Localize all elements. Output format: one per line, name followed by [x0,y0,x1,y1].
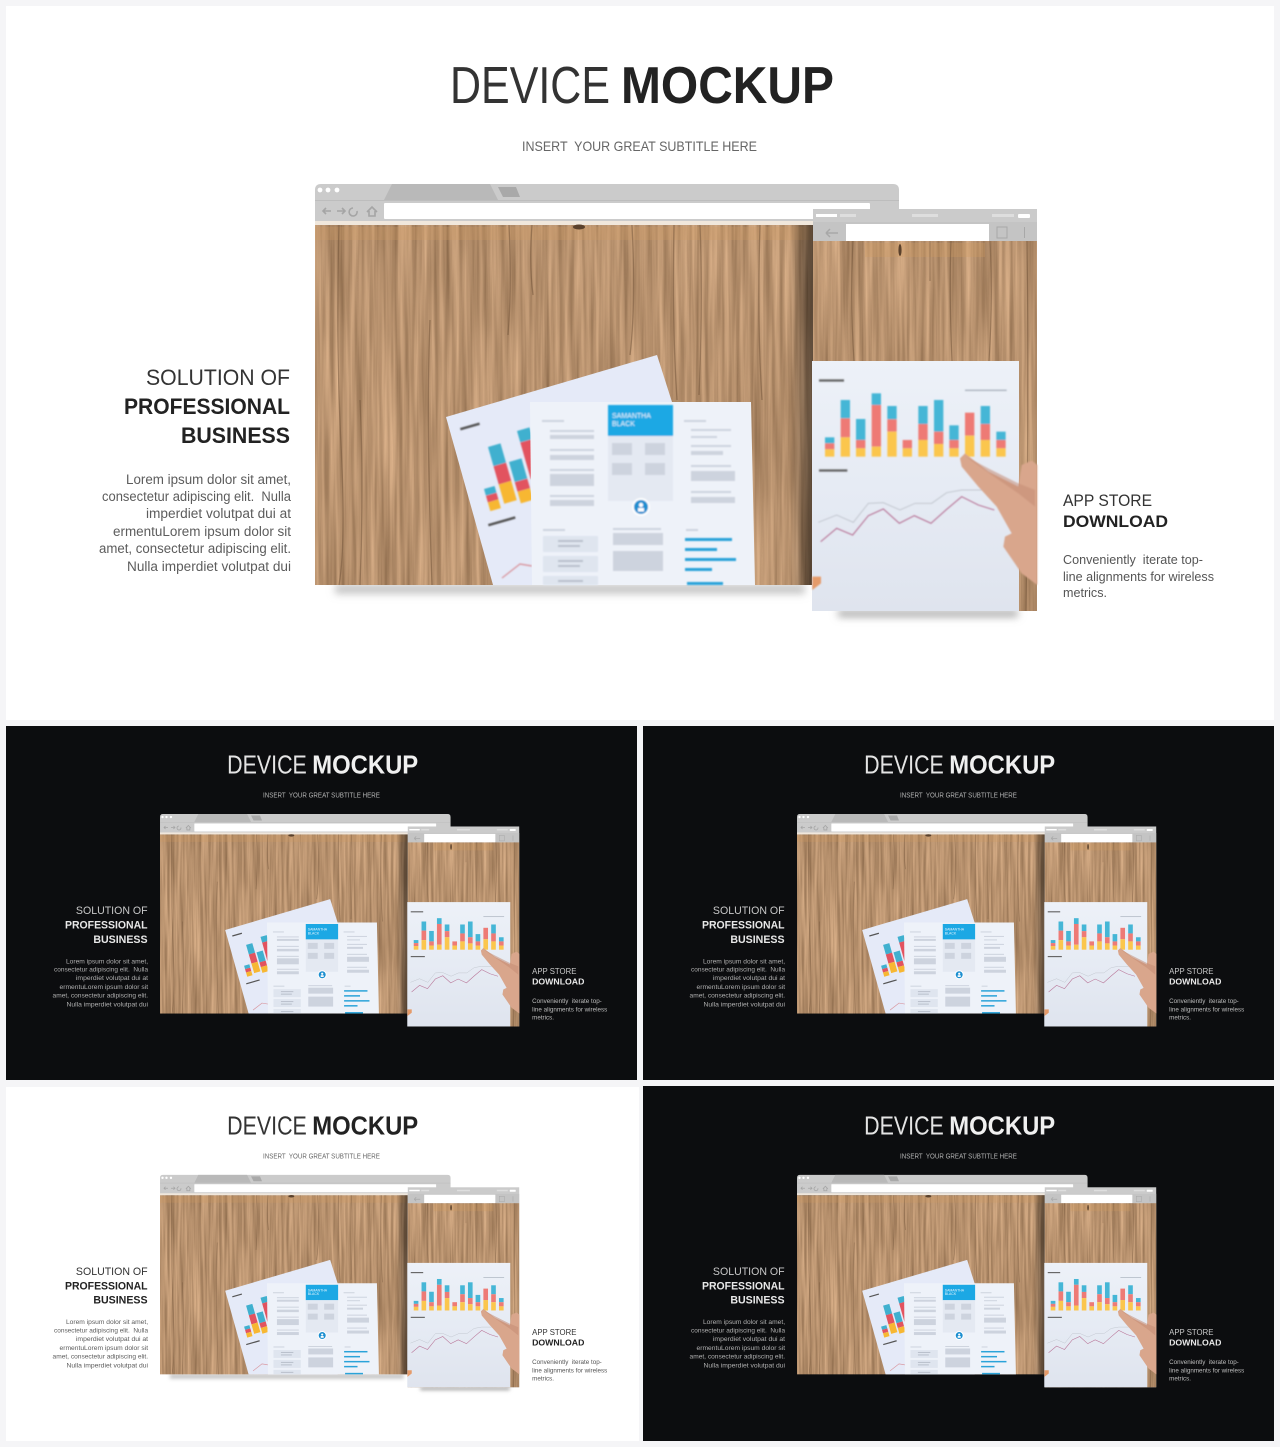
title [450,57,834,115]
panel: dark slide bottom right: imperdiet volutpat dui at [713,1336,785,1343]
panel: dark slide top left: MOCKUP [312,752,418,780]
panel: dark slide top left: BUSINESS [93,934,148,946]
panel: dark slide top right: APP STORE [1169,966,1214,976]
panel: dark slide top right: line alignments for wireless [1169,1007,1244,1014]
panel: dark slide top right: metrics. [1169,1015,1191,1022]
panel: dark slide top left [6,726,637,1080]
body text right: line alignments for wireless [1063,569,1214,584]
panel: dark slide bottom right: DOWNLOAD [1169,1337,1221,1347]
panel: white slide bottom left: line alignments for wireless [532,1367,607,1374]
panel: dark slide top left: Conveniently iterate top- [532,998,602,1005]
panel: dark slide top left: SOLUTION OF [76,905,148,917]
panel: dark slide bottom right: DEVICE [864,1113,944,1141]
panel: dark slide top right: BUSINESS [730,934,785,946]
panel: white slide bottom left: DOWNLOAD [532,1337,584,1347]
panel: dark slide top right: imperdiet volutpat dui at [713,975,785,982]
panel: dark slide top right: INSERT YOUR GREAT SUBTITLE HERE [900,793,1017,800]
panel: dark slide top left: Nulla imperdiet volutpat dui [66,1002,149,1009]
panel: dark slide top right: consectetur adipiscing elit. Nulla [691,967,785,974]
heading: solution of professional business: SOLUTION OF [146,365,290,390]
panel: white slide bottom left: DEVICE [227,1113,307,1141]
panel: dark slide bottom right: Nulla imperdiet volutpat dui [703,1362,786,1369]
panel: dark slide top right: Conveniently iterate top- [1169,998,1239,1005]
panel: dark slide top left: ermentuLorem ipsum dolor sit [60,984,148,991]
panel: dark slide bottom right: metrics. [1169,1375,1191,1382]
panel: dark slide top right: SOLUTION OF [713,905,785,917]
panel: white slide bottom left: Nulla imperdiet volutpat dui [66,1362,149,1369]
panel: white slide bottom left: APP STORE [532,1327,577,1337]
body text right: metrics. [1063,585,1107,600]
panel: main white slide [6,6,1274,720]
heading: app store download: APP STORE [1063,491,1152,510]
panel: white slide bottom left: imperdiet volutpat dui at [76,1336,148,1343]
panel: white slide bottom left: Conveniently iterate top- [532,1359,602,1366]
panel: dark slide bottom right: SOLUTION OF [713,1266,785,1278]
panel: dark slide bottom right: amet, consectetur adipiscing elit. [690,1353,785,1360]
panel: dark slide top left: INSERT YOUR GREAT SUBTITLE HERE [263,793,380,800]
panel: white slide bottom left: consectetur adipiscing elit. Nulla [54,1328,148,1335]
title: MOCKUP [621,57,834,115]
panel: dark slide top left: APP STORE [532,966,577,976]
panel: white slide bottom left: MOCKUP [312,1113,418,1141]
panel: dark slide top left: metrics. [532,1015,554,1022]
panel: white slide bottom left: INSERT YOUR GREAT SUBTITLE HERE [263,1153,380,1160]
panel: dark slide top right: Nulla imperdiet volutpat dui [703,1002,786,1009]
body text left: amet, consectetur adipiscing elit. [99,541,291,556]
body text right [1063,552,1214,600]
subtitle: INSERT YOUR GREAT SUBTITLE HERE [522,138,757,154]
body text left: ermentuLorem ipsum dolor sit [113,524,291,539]
body text left: Nulla imperdiet volutpat dui [127,559,291,574]
body text left [99,472,291,574]
heading: app store download [1063,491,1168,531]
panel: dark slide bottom right: PROFESSIONAL [702,1280,785,1292]
panel: dark slide top left: DOWNLOAD [532,977,584,987]
panel: dark slide bottom right: APP STORE [1169,1327,1214,1337]
heading: solution of professional business: BUSINESS [181,423,290,448]
panel: white slide bottom left: PROFESSIONAL [65,1280,148,1292]
panel: dark slide top right: Lorem ipsum dolor sit amet, [703,958,785,965]
panel: dark slide top left: line alignments for wireless [532,1007,607,1014]
panel: white slide bottom left: metrics. [532,1375,554,1382]
panel: dark slide bottom right: ermentuLorem ipsum dolor sit [697,1345,785,1352]
panel: dark slide top left: DEVICE [227,752,307,780]
panel: dark slide top right: amet, consectetur adipiscing elit. [690,993,785,1000]
panel: dark slide top left: consectetur adipiscing elit. Nulla [54,967,148,974]
panel: white slide bottom left: BUSINESS [93,1295,148,1307]
heading: app store download: DOWNLOAD [1063,512,1168,531]
heading: solution of professional business: PROFESSIONAL [124,394,290,419]
panel: dark slide bottom right [643,1086,1274,1441]
body text left: imperdiet volutpat dui at [146,506,291,521]
panel: dark slide top right: ermentuLorem ipsum dolor sit [697,984,785,991]
panel: white slide bottom left: SOLUTION OF [76,1266,148,1278]
panel: dark slide top left: Lorem ipsum dolor sit amet, [66,958,148,965]
body text left: consectetur adipiscing elit. Nulla [102,489,291,504]
panel: white slide bottom left: ermentuLorem ipsum dolor sit [60,1345,148,1352]
title: DEVICE [450,57,610,115]
panel: white slide bottom left: Lorem ipsum dolor sit amet, [66,1319,148,1326]
body text left: Lorem ipsum dolor sit amet, [126,472,291,487]
body text right: Conveniently iterate top- [1063,552,1203,567]
panel: white slide bottom left: amet, consectetur adipiscing elit. [53,1353,148,1360]
panel: dark slide bottom right: line alignments for wireless [1169,1367,1244,1374]
panel: dark slide bottom right: Conveniently iterate top- [1169,1359,1239,1366]
panel: dark slide bottom right: MOCKUP [949,1113,1055,1141]
heading: solution of professional business [124,365,290,448]
device shadows [335,584,1018,617]
panel: dark slide top right: DEVICE [864,752,944,780]
panel: dark slide top left: imperdiet volutpat dui at [76,975,148,982]
panel: dark slide bottom right: INSERT YOUR GREAT SUBTITLE HERE [900,1153,1017,1160]
panel: dark slide top left: PROFESSIONAL [65,919,148,931]
panel: dark slide top right: MOCKUP [949,752,1055,780]
device mockup: browser and phone [315,184,1037,611]
panel: dark slide bottom right: consectetur adipiscing elit. Nulla [691,1328,785,1335]
panel: dark slide top right: PROFESSIONAL [702,919,785,931]
panel: dark slide bottom right: BUSINESS [730,1295,785,1307]
panel: dark slide top right: DOWNLOAD [1169,977,1221,987]
panel: dark slide top right [643,726,1274,1080]
panel: white slide bottom left [6,1087,639,1441]
panel: dark slide top left: amet, consectetur adipiscing elit. [53,993,148,1000]
panel: dark slide bottom right: Lorem ipsum dolor sit amet, [703,1319,785,1326]
